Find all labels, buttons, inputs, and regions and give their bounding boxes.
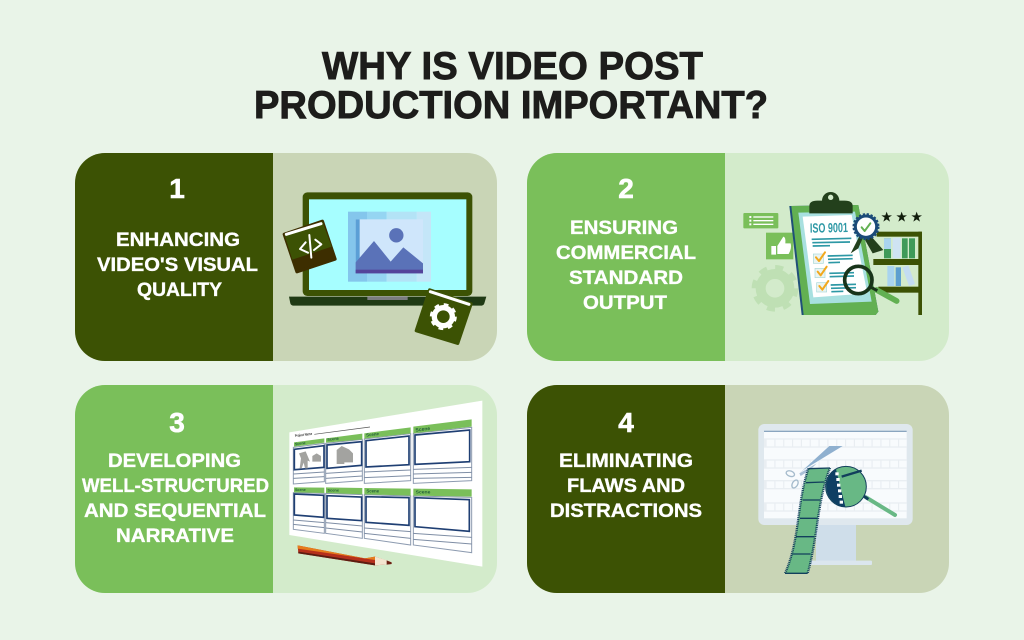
icon: storyboard sheet and pencil: Scene: [295, 441, 306, 446]
heading: card 4: [550, 451, 702, 522]
heading: card 3: WELL-STRUCTURED: [82, 476, 269, 497]
heading: card 2: [556, 218, 696, 314]
icon: storyboard sheet and pencil: Scene: [366, 488, 380, 493]
heading: card 3: DEVELOPING: [108, 451, 241, 472]
icon: storyboard sheet and pencil: [289, 401, 482, 567]
heading: card 3: [82, 451, 269, 547]
heading: card 1: VIDEO'S VISUAL: [97, 255, 258, 276]
title: PRODUCTION IMPORTANT?: [254, 84, 768, 127]
panel: card 2 commercial standard output: [527, 153, 949, 361]
panel: card 1 enhancing visual quality: [75, 153, 497, 361]
icon: storyboard sheet and pencil: Scene: [415, 426, 431, 434]
heading: card 3: NARRATIVE: [116, 526, 234, 547]
heading: card 4: ELIMINATING: [559, 451, 693, 472]
heading: card 2: OUTPUT: [583, 293, 667, 314]
panel: card 3 well-structured narrative: [75, 385, 497, 593]
heading: card 1: [97, 230, 258, 301]
heading: card 2: STANDARD: [569, 268, 683, 289]
heading: card 3: AND SEQUENTIAL: [84, 501, 266, 522]
icon: monitor, film strip, scissors and magnifier: [758, 424, 913, 573]
icon: storyboard sheet and pencil: Project Name: [295, 432, 312, 438]
heading: card 4: DISTRACTIONS: [550, 501, 702, 522]
title: WHY IS VIDEO POST: [322, 45, 703, 88]
number 3: 3: [169, 407, 185, 438]
icon: ISO 9001 clipboard, shelf and magnifier: [743, 192, 922, 315]
icon: laptop with image and code tiles: [284, 192, 486, 343]
number 4: 4: [618, 407, 634, 438]
icon: storyboard sheet and pencil: Scene: [416, 489, 431, 495]
heading: card 2: COMMERCIAL: [556, 243, 696, 264]
icon: storyboard sheet and pencil: Scene: [366, 431, 380, 438]
heading: card 1: ENHANCING: [116, 230, 240, 251]
heading: card 4: FLAWS AND: [567, 476, 685, 497]
heading: card 2: ENSURING: [570, 218, 678, 239]
title: [254, 45, 768, 127]
icon: storyboard sheet and pencil: Scene: [327, 487, 340, 492]
number 2: 2: [618, 173, 634, 204]
icon: ISO 9001 clipboard, shelf and magnifier: ISO 9001: [810, 220, 848, 236]
panel: card 4 eliminating flaws: [527, 385, 949, 593]
icon: storyboard sheet and pencil: Scene: [327, 436, 340, 442]
icon: storyboard sheet and pencil: Scene: [295, 488, 306, 492]
number 1: 1: [169, 173, 185, 204]
heading: card 1: QUALITY: [137, 280, 222, 301]
